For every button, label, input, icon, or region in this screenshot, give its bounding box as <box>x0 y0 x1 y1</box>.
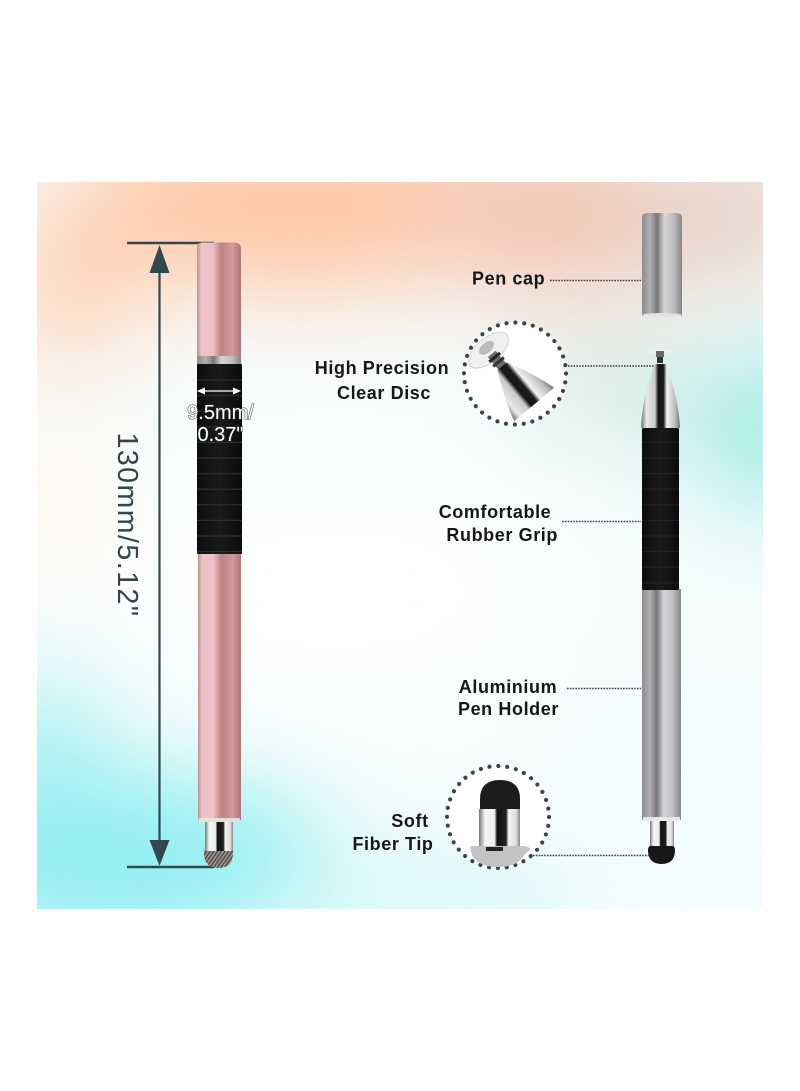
precision disc <box>649 350 671 363</box>
tip neck <box>650 820 674 846</box>
dimension: height arrow <box>127 243 214 867</box>
rose barrel lower <box>198 553 241 820</box>
width arrow <box>197 388 241 394</box>
rubber grip <box>197 364 242 554</box>
chrome band <box>197 356 241 365</box>
callout: aluminium holder: Pen Holder <box>458 699 559 719</box>
dimension label: length: 130mm/5.12" <box>111 432 143 618</box>
tip: chrome neck <box>205 820 233 851</box>
detail circle: fiber tip <box>447 766 549 868</box>
dimension label: diameter <box>187 402 254 446</box>
rose gold pen <box>197 242 242 868</box>
rubber grip <box>642 428 679 590</box>
callout: rubber grip: Rubber Grip <box>446 525 558 545</box>
callout: fiber tip: Soft <box>391 811 429 831</box>
callout: pen cap: Pen cap <box>472 268 545 288</box>
callout: fiber tip: Fiber Tip <box>352 834 434 854</box>
callout: rubber grip: Comfortable <box>439 502 551 522</box>
detail circle: clear disc <box>461 322 566 424</box>
callout: aluminium holder: Aluminium <box>459 677 557 697</box>
chrome cone <box>641 364 680 428</box>
rose cap <box>197 242 241 357</box>
callout: clear disc: High Precision <box>315 358 449 378</box>
callout: clear disc: Clear Disc <box>337 383 431 403</box>
silver pen cap <box>642 213 682 317</box>
aluminium barrel <box>642 589 681 820</box>
callout: fiber tip <box>352 811 650 856</box>
dimension label: diameter: 9.5mm/ <box>187 402 254 424</box>
callout: aluminium holder <box>458 677 641 719</box>
dimension label: diameter: 0.37" <box>197 424 244 446</box>
fibre tip <box>648 845 675 864</box>
tip: mesh fibre <box>204 850 233 868</box>
silver pen <box>641 350 681 864</box>
callout: clear disc <box>315 358 654 403</box>
gradient background panel <box>37 182 763 909</box>
callout: rubber grip <box>439 502 641 545</box>
